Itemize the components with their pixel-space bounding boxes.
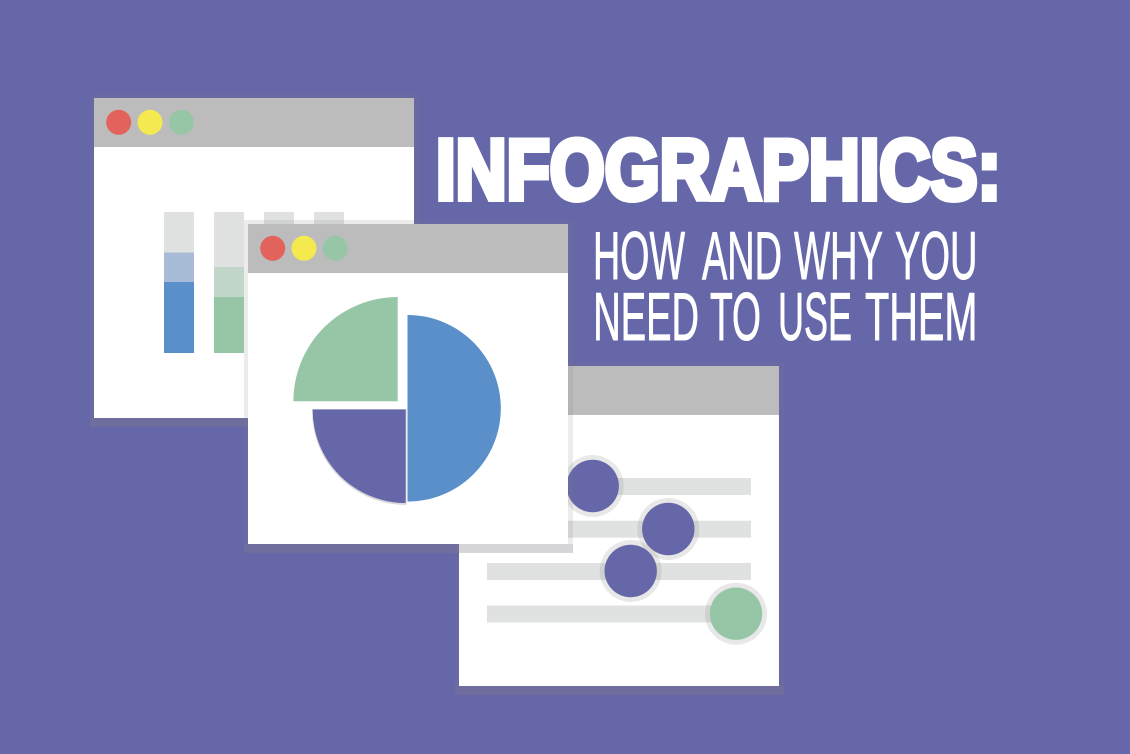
window title bar (248, 224, 568, 273)
subtitle line 2: NEED (593, 279, 699, 355)
window title bar (459, 366, 779, 415)
slider handle 4 (705, 583, 767, 645)
panel: slider window (455, 362, 784, 695)
window buttons (260, 236, 348, 261)
slider handle 3 (600, 540, 662, 602)
bar chart (164, 212, 344, 353)
panel: pie chart window (244, 220, 573, 553)
slider handle 2 (637, 498, 699, 560)
pie slice: green quarter (293, 297, 398, 401)
subtitle line 2 (593, 279, 978, 355)
subtitle line 2: TO (710, 279, 761, 355)
subtitle line 1: WHY (794, 218, 883, 294)
pie slice: purple quarter (312, 409, 406, 505)
subtitle line 1: AND (702, 218, 782, 294)
pie chart (293, 297, 501, 505)
subtitle line 1: YOU (895, 218, 978, 294)
subtitle line 2: THEM (865, 279, 978, 355)
panel: bar chart window (90, 94, 419, 427)
window buttons (106, 110, 194, 135)
subtitle line 2: USE (778, 279, 852, 355)
subtitle line 1: HOW (593, 218, 685, 294)
subtitle line 1 (593, 218, 978, 294)
window title bar (94, 98, 414, 147)
pie slice: blue half (408, 315, 501, 502)
slider handle 1 (562, 455, 624, 517)
slider tracks (487, 478, 751, 622)
title: INFOGRAPHICS: (436, 123, 1001, 218)
